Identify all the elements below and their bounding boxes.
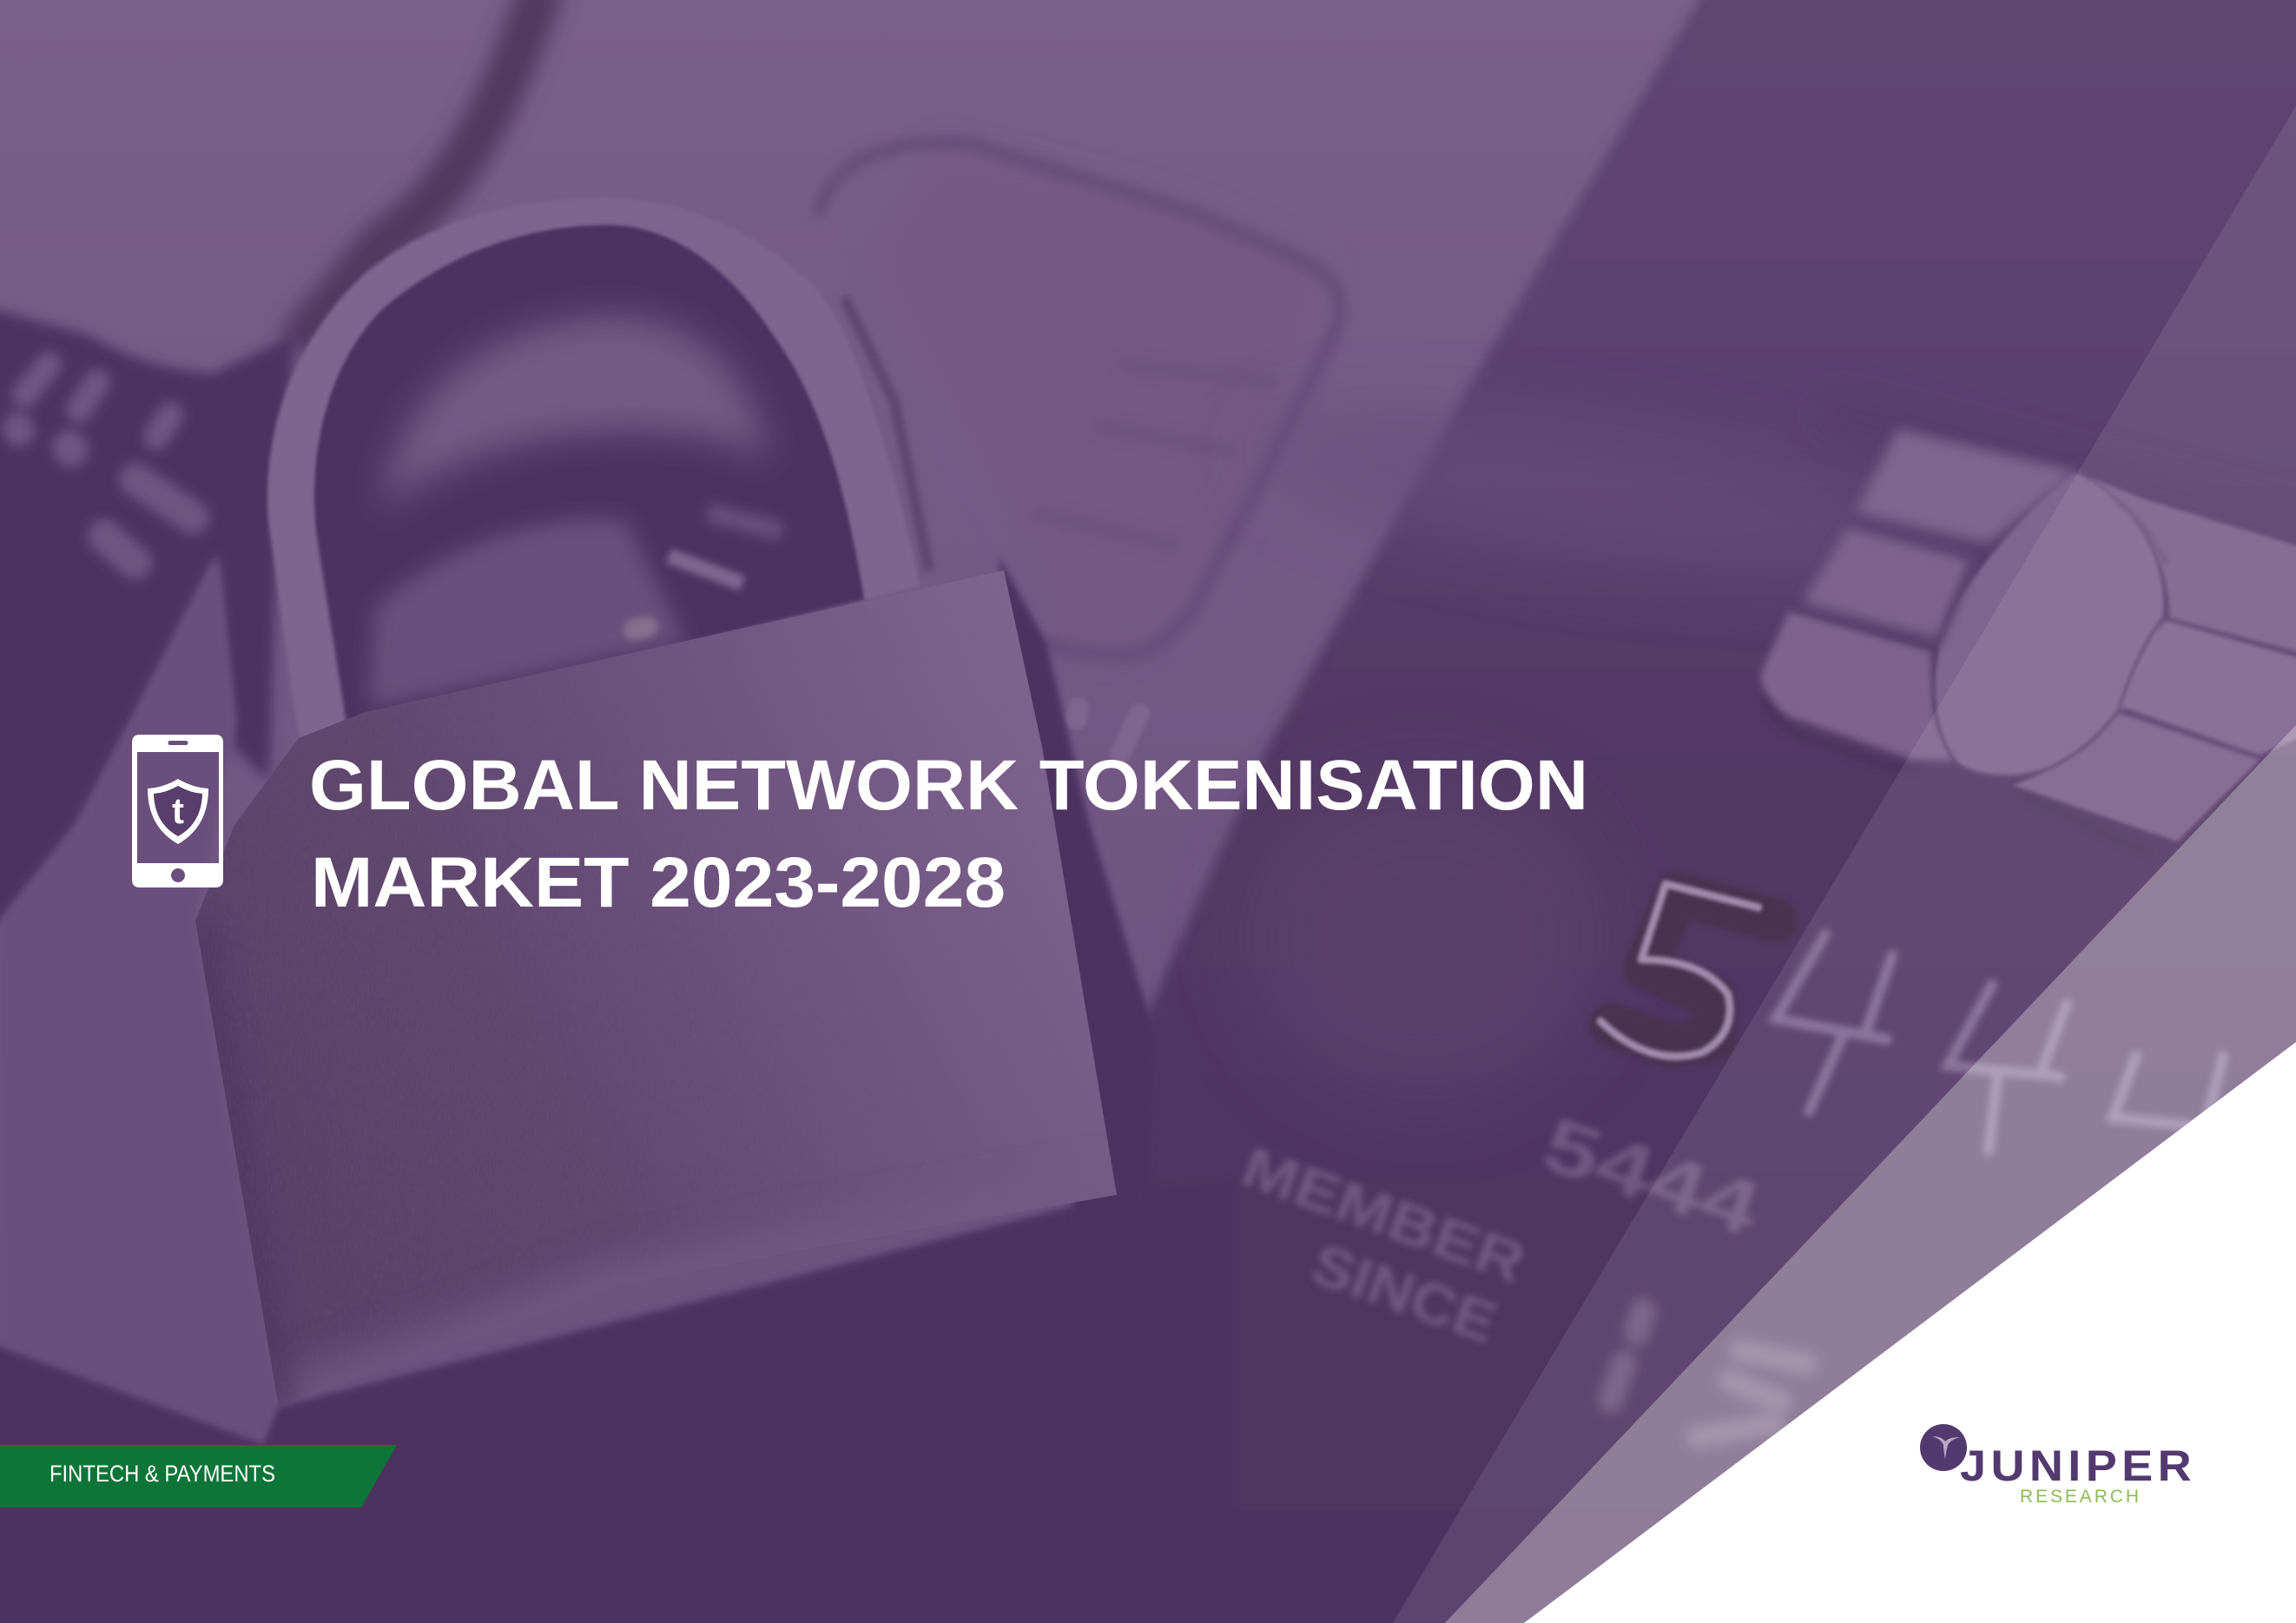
translucent diagonal band, inner — [1445, 725, 2296, 1623]
padlock shackle — [267, 198, 920, 738]
sliver of shadow right of the lock — [999, 556, 1155, 1233]
icon: smartphone with token shield — [132, 735, 223, 887]
logo: Juniper Research — [1920, 1424, 2196, 1507]
title: GLOBAL NETWORK TOKENISATION — [309, 746, 1588, 825]
embossed card digits — [1600, 884, 2223, 1151]
left dark card with blurred digits — [0, 304, 295, 925]
translucent diagonal band, outer — [1393, 106, 2296, 1623]
padlock body — [174, 556, 1129, 1424]
printed card text, blurred in the photo: 5444 — [1533, 1100, 1770, 1252]
printed card text, blurred in the photo: SINCE — [1303, 1230, 1505, 1356]
title — [309, 746, 1588, 922]
dark payment card on right — [1042, 0, 2296, 1623]
title: MARKET 2023-2028 — [311, 843, 1006, 922]
category banner: fintech and payments — [0, 1445, 397, 1508]
EMV chip — [1761, 429, 2296, 855]
blurred embossed date digits — [1611, 1311, 1806, 1437]
printed card text, blurred in the photo: MEMBER — [1234, 1134, 1534, 1295]
printed card text, blurred in the photo — [1234, 1100, 1770, 1356]
icon: smartphone with token shield: t — [172, 790, 184, 831]
category banner: fintech and payments: FINTECH & PAYMENTS — [49, 1461, 275, 1487]
top-left card edge — [295, 0, 543, 347]
small highlights next to the lock — [1077, 708, 1139, 754]
logo: Juniper Research: RESEARCH — [2020, 1487, 2139, 1507]
dark foreground — [0, 1181, 1233, 1623]
lower-left card — [0, 556, 279, 1444]
white corner triangle — [1524, 1042, 2296, 1623]
middle card outline with faded chip — [816, 142, 1340, 656]
logo: Juniper Research: JUNIPER — [1960, 1442, 2196, 1490]
